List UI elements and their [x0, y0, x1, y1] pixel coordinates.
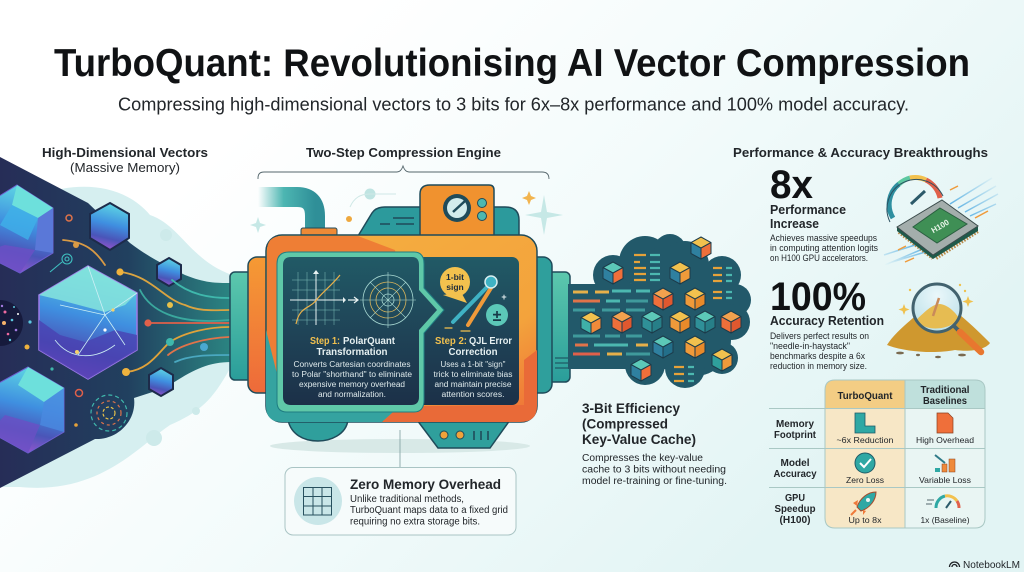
section heading: two-step compression engine: Two-Step Compression Engine	[306, 145, 501, 160]
stat: 100% accuracy retention: benchmarks despite a 6x	[770, 351, 866, 361]
key-value arrows	[573, 291, 650, 354]
illustration: compressed key-value cache cubes	[568, 234, 751, 388]
cell labels: Zero Loss	[846, 475, 884, 485]
stat: 8x performance increase: Performance	[770, 203, 846, 217]
cell labels: High Overhead	[916, 435, 974, 445]
stat: 8x performance increase: Achieves massive speedups	[770, 233, 878, 243]
section heading: high-dimensional vectors: (Massive Memory)	[70, 161, 180, 175]
stat: 8x performance increase: on H100 GPU accelerators.	[770, 253, 868, 263]
callout text: Unlike traditional methods,	[350, 494, 464, 505]
text: 3-bit efficiency: Compresses the key-value	[582, 453, 703, 464]
icon: plus-minus circle	[486, 292, 508, 326]
icon: 1-bit sign bubble	[440, 267, 470, 303]
text: step 2: Correction	[448, 347, 498, 358]
text: step 1: Transformation	[316, 347, 388, 358]
text: 3-bit efficiency	[582, 401, 727, 487]
stat: 8x performance increase: in computing attention logits	[770, 243, 879, 253]
text: step 2	[434, 336, 512, 399]
text: step 1: and normalization.	[318, 390, 386, 399]
left connector flange	[230, 257, 278, 393]
row labels: (H100)	[780, 514, 810, 526]
icon: H100 chip with speedometer	[884, 178, 998, 265]
icon: H100 chip with speedometer: H100	[930, 217, 951, 235]
arrow: cartesian to polar	[348, 297, 358, 303]
panel: step 2 background	[410, 257, 519, 405]
stat: 8x performance increase: 8x	[770, 163, 813, 207]
speedometer	[887, 178, 943, 222]
logo: NotebookLM: NotebookLM	[963, 560, 1020, 571]
icon: large hexagon centre	[39, 266, 137, 379]
text: 3-bit efficiency: (Compressed	[582, 416, 668, 432]
title: TurboQuant: Revolutionising AI Vector Compression	[54, 42, 970, 85]
icon: plus-minus circle: ±	[493, 308, 502, 325]
chip body	[897, 204, 978, 259]
callout: zero memory overhead	[285, 468, 516, 535]
speed lines	[884, 178, 998, 265]
icon: small hexagons	[90, 203, 181, 396]
icon: galaxy swirl	[91, 395, 127, 431]
text: step 2: trick to eliminate bias	[434, 370, 512, 379]
cell labels: Variable Loss	[919, 475, 971, 485]
panel content: step 2	[434, 267, 512, 399]
panel frame: step 1	[277, 252, 444, 412]
column: TurboQuant	[825, 380, 905, 528]
section heading: high-dimensional vectors	[42, 146, 208, 175]
stat: 100% accuracy retention: reduction in memory size.	[770, 361, 867, 371]
chart: polar plot	[360, 272, 416, 328]
icon: sphere of data points	[0, 300, 23, 346]
icon: 1-bit sign bubble: sign	[446, 282, 464, 292]
icon: magnifying glass over haystack	[887, 284, 990, 358]
dark cloud	[568, 234, 751, 388]
key-value bars	[634, 255, 732, 381]
cubes	[581, 237, 741, 381]
cell labels	[836, 435, 974, 525]
icon: fixed grid	[294, 477, 342, 525]
section heading: high-dimensional vectors: High-Dimensional Vectors	[42, 146, 208, 160]
floor shadow	[270, 439, 530, 453]
cell labels: Up to 8x	[848, 515, 882, 525]
icon: large hexagon bottom-left	[0, 367, 64, 453]
lower feet	[288, 420, 510, 448]
icon: plus-minus circle: +	[501, 292, 507, 302]
icon: compass and pencil	[445, 276, 497, 331]
text: step 1: expensive memory overhead	[299, 380, 405, 389]
panel: step 1	[283, 257, 437, 405]
text: 3-bit efficiency: 3-Bit Efficiency	[582, 401, 680, 416]
text: step 2: Step 2:	[435, 336, 467, 347]
text: 3-bit efficiency: Key-Value Cache)	[582, 432, 696, 447]
stat: 100% accuracy retention: 100%	[770, 275, 866, 319]
stat: 100% accuracy retention: Accuracy Retention	[770, 313, 884, 328]
machine body	[266, 235, 537, 422]
text: step 1: to Polar "shorthand" to eliminate	[292, 370, 413, 379]
table headers	[838, 385, 970, 407]
arrows: converging data streams	[63, 240, 229, 372]
stat: 100% accuracy retention: Delivers perfect results on	[770, 331, 869, 341]
cell labels: 1x (Baseline)	[920, 515, 970, 525]
icon: 1-bit sign bubble: 1-bit	[446, 272, 464, 282]
callout text	[350, 477, 508, 528]
input pipe	[258, 197, 337, 236]
text: step 2: QJL Error	[469, 336, 512, 347]
icon: variable loss bars	[935, 455, 955, 472]
row labels: Model	[780, 457, 810, 469]
row labels: Memory	[776, 418, 814, 430]
callout text: TurboQuant maps data to a fixed grid	[350, 505, 508, 516]
table headers: Baselines	[923, 396, 967, 407]
text: step 1	[292, 336, 413, 399]
callout text: Zero Memory Overhead	[350, 477, 501, 492]
table headers: Traditional	[920, 385, 970, 396]
row labels: Speedup	[774, 503, 816, 515]
illustration: high-dimensional vector field	[0, 157, 232, 488]
text: 3-bit efficiency: cache to 3 bits without needing	[582, 464, 726, 476]
icon: reduced memory block	[855, 413, 875, 433]
table headers: TurboQuant	[838, 391, 893, 402]
text: step 1: Converts Cartesian coordinates	[294, 360, 410, 369]
comparison table	[769, 380, 985, 528]
icon: concentric signal	[50, 254, 72, 272]
icon: overhead document	[937, 413, 953, 433]
row labels: GPU	[785, 492, 805, 504]
icon: zero loss check	[855, 453, 875, 473]
chip pins	[899, 231, 978, 258]
data nodes	[24, 215, 208, 427]
subtitle: Compressing high-dimensional vectors to 3 bits for 6x–8x performance and 100% model accuracy.	[118, 94, 909, 114]
icon: baseline gauge	[926, 496, 959, 508]
stat: 100% accuracy retention	[770, 275, 884, 371]
stat: 8x performance increase	[770, 163, 879, 263]
callout text: requiring no extra storage bits.	[350, 516, 480, 528]
connector line to callout	[399, 430, 401, 467]
chart: cartesian plot	[290, 270, 346, 325]
upper housing	[358, 207, 519, 236]
text: 3-bit efficiency: model re-training or fine-tuning.	[582, 476, 727, 487]
stat: 8x performance increase: Increase	[770, 217, 819, 231]
right connector flange	[528, 257, 570, 393]
decorative sparkles and nodes	[250, 188, 563, 235]
row labels: Accuracy	[774, 468, 817, 480]
illustration: compression engine machine	[230, 185, 570, 453]
column: Traditional Baselines	[905, 380, 985, 528]
icon: large hexagon top-left	[0, 185, 53, 273]
bracket	[258, 166, 549, 179]
cell labels: ~6x Reduction	[836, 435, 894, 445]
section heading: performance and accuracy: Performance & Accuracy Breakthroughs	[733, 145, 988, 160]
text: step 1: Step 1:	[310, 336, 340, 347]
row labels: Footprint	[774, 429, 816, 441]
text: step 2: attention scores.	[442, 390, 504, 399]
stat: 100% accuracy retention: "needle-in-haystack"	[770, 341, 850, 351]
text: step 2: Uses a 1-bit "sign"	[440, 360, 506, 369]
icon: rocket	[851, 492, 876, 515]
row labels	[774, 418, 817, 526]
text: step 2: and maintain precise	[434, 380, 512, 389]
gauge tab	[420, 185, 494, 236]
text: step 1: PolarQuant	[343, 336, 396, 347]
